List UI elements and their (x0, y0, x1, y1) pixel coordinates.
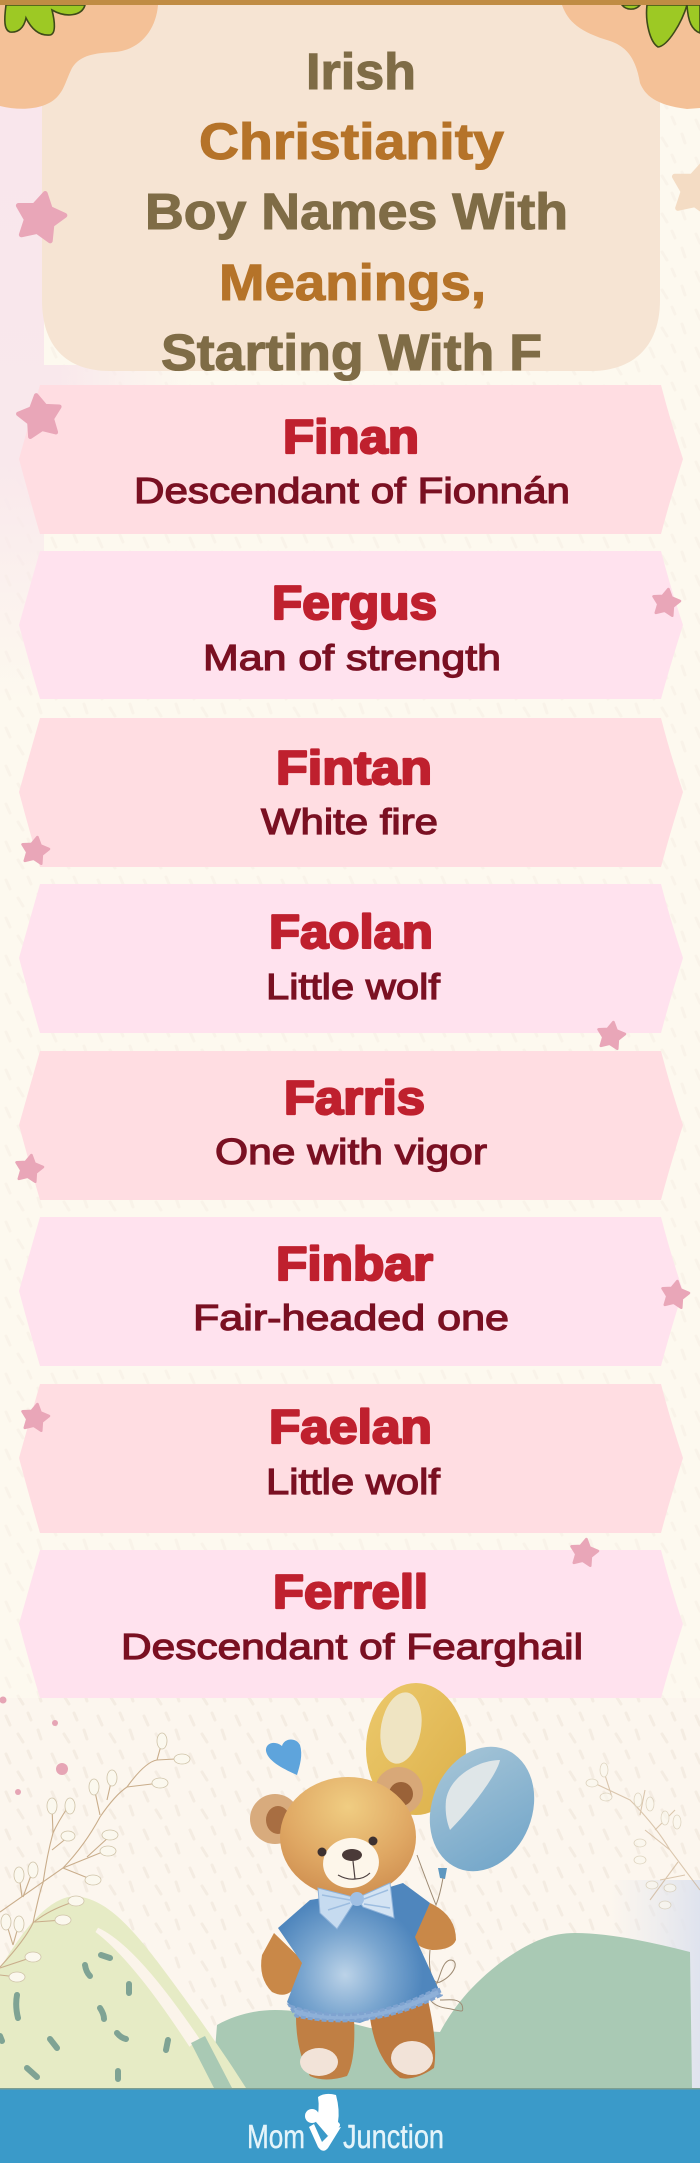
name: Fintan (276, 741, 432, 794)
top right leaves (622, 5, 700, 47)
title: Christianity (199, 113, 505, 170)
decorative stars (13, 158, 700, 1566)
meaning: Little wolf (266, 1461, 441, 1502)
band (19, 1217, 683, 1366)
meaning: Little wolf (266, 966, 441, 1007)
band (19, 718, 683, 867)
panel: Farris (19, 1051, 683, 1200)
decorative dots (0, 1696, 68, 1795)
teal stripe (191, 2036, 232, 2088)
right teal hill (212, 1933, 692, 2088)
left light green hill (0, 1896, 246, 2088)
ears (250, 1767, 423, 1844)
panel: Faelan (19, 1384, 683, 1533)
name: Faolan (269, 905, 433, 958)
meaning: Descendant of Fearghail (121, 1626, 583, 1667)
panel: Finbar (19, 1217, 683, 1366)
legs (296, 2000, 435, 2080)
top right corner blob (562, 5, 700, 109)
icon: mother and child (305, 2094, 341, 2151)
title: Meanings, (219, 254, 486, 311)
title (145, 43, 568, 381)
arms (261, 1903, 456, 1995)
name: Finan (283, 410, 419, 463)
top left leaves (5, 5, 85, 35)
dress (278, 1883, 441, 2023)
band (19, 1051, 683, 1200)
logo (247, 2094, 444, 2155)
header panel (0, 0, 700, 381)
panel background (42, 5, 660, 371)
hill dashes (0, 1955, 168, 2079)
panel: Finan (19, 385, 683, 534)
meaning: One with vigor (215, 1131, 487, 1172)
panel: Faolan (19, 884, 683, 1033)
yellow balloon (366, 1683, 466, 1815)
meaning: Man of strength (203, 637, 501, 678)
logo: Junction (343, 2118, 444, 2155)
title: Starting With F (161, 324, 542, 381)
name: Fergus (272, 576, 437, 629)
name: Ferrell (273, 1565, 428, 1618)
illustration: teddy bear with balloons (250, 1683, 552, 2080)
meaning: White fire (261, 801, 438, 842)
illustration: hills and branches (0, 1696, 700, 2088)
band (19, 385, 683, 534)
meaning: Fair-headed one (193, 1297, 509, 1338)
bow (318, 1883, 394, 1929)
panel: Ferrell (19, 1550, 683, 1698)
top left corner blob (0, 5, 158, 109)
name: Finbar (276, 1237, 433, 1290)
title: Boy Names With (145, 183, 568, 240)
meaning: Descendant of Fionnán (134, 470, 570, 511)
name: Faelan (269, 1400, 432, 1453)
title: Irish (306, 43, 416, 100)
hill stripe (97, 1930, 196, 2043)
panel: Fergus (19, 551, 683, 699)
blue balloon (412, 1731, 552, 1887)
name: Farris (284, 1071, 425, 1124)
balloon strings (417, 1855, 463, 2011)
top bar (0, 0, 700, 5)
right branch (586, 1763, 700, 1909)
band (19, 884, 683, 1033)
band (19, 1550, 683, 1698)
left branch (0, 1733, 190, 1982)
icon: blue heart (266, 1739, 301, 1775)
panel: Fintan (19, 718, 683, 867)
head (280, 1777, 416, 1897)
band (19, 1384, 683, 1533)
band (19, 551, 683, 699)
footer bar (0, 2088, 700, 2163)
logo text: Mom (247, 2118, 305, 2155)
